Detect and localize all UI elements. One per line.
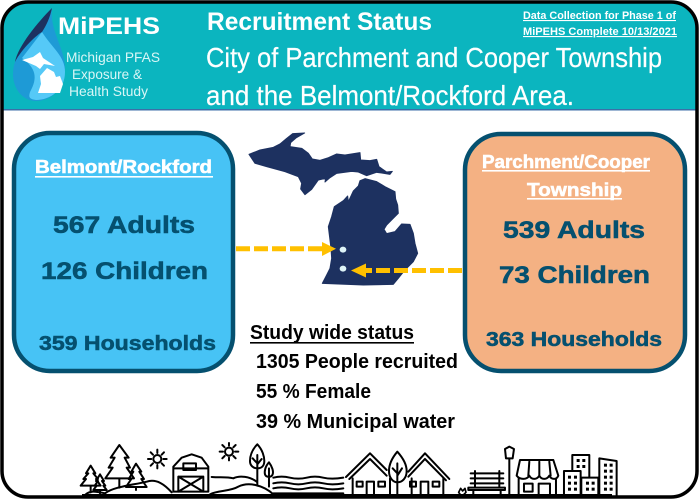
header band [2,2,697,110]
panel: Belmont/Rockford: 567 Adults [53,212,195,239]
panel: Belmont/Rockford [14,133,233,371]
logo text: Michigan PFAS [66,50,160,65]
study wide status: Study wide status [250,322,414,344]
data collection note: Data Collection for Phase 1 of [523,10,676,22]
panel: Parchment/Cooper Township: Parchment/Cooper [482,152,650,172]
ground line [82,494,612,498]
skyline: houses, bench, lamp, shop and city [346,447,617,496]
panel: Belmont/Rockford: Belmont/Rockford [35,157,212,177]
logo text: Exposure & [72,67,142,82]
title: and the Belmont/Rockford Area. [206,80,574,111]
data collection note [523,10,677,38]
arrow: Parchment/Cooper to map [351,264,462,278]
title [206,8,662,111]
logo text: MiPEHS [58,13,160,40]
panel: Parchment/Cooper Township [465,134,685,371]
city windows [568,459,613,491]
panel: Parchment/Cooper Township: 539 Adults [503,217,645,244]
panel: Parchment/Cooper Township: Township [527,180,622,200]
logo text [58,13,160,99]
study wide status [250,322,458,433]
study wide status: 55 % Female [256,381,371,403]
panel: Parchment/Cooper Township: 73 Children [499,262,650,289]
study wide status: 1305 People recruited [256,351,458,373]
panel: Belmont/Rockford: 126 Children [41,258,208,285]
skyline: trees, barn, hills and water [81,443,343,495]
study wide status: 39 % Municipal water [256,411,455,433]
arrow: Belmont/Rockford to map [236,242,336,256]
title: City of Parchment and Cooper Township [206,42,662,73]
map: Michigan [249,133,418,285]
data collection note: MiPEHS Complete 10/13/2021 [523,26,677,38]
panel: Belmont/Rockford: 359 Households [39,333,216,355]
logo: MiPEHS water drop [13,8,65,101]
logo text: Health Study [69,84,148,99]
title: Recruitment Status [207,8,432,36]
panel: Parchment/Cooper Township: 363 Households [486,329,662,351]
